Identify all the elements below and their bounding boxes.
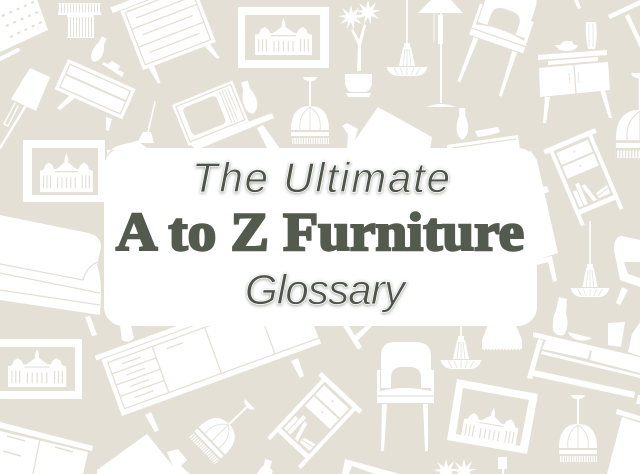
- icon: plant top bottom centre: [433, 459, 477, 474]
- icon: vase right: [553, 297, 568, 335]
- icon: floor lamp: [418, 0, 463, 107]
- icon: table lamp left: [0, 68, 50, 148]
- icon: vase bottom: [257, 459, 273, 474]
- heading: A to Z Furniture: A to Z Furniture: [116, 202, 524, 262]
- icon: framed building top: [238, 7, 329, 68]
- icon: television on table: [172, 80, 281, 150]
- icon: frame bottom centre: [342, 459, 400, 474]
- icon: framed building left: [23, 140, 105, 202]
- icon: nightstand bottom: [264, 372, 362, 472]
- icon: tilted chest of drawers: [110, 0, 233, 90]
- icon: long sideboard: [95, 281, 321, 432]
- icon: potted plant: [338, 0, 381, 97]
- icon: cabinet behind panel right: [530, 150, 558, 282]
- icon: cross bar top right: [574, 0, 640, 48]
- icon: framed building tilted: [447, 379, 538, 454]
- icon: hanging chandelier right: [571, 221, 609, 297]
- icon: pendant lamp centre top: [291, 77, 329, 144]
- icon: cabinet bottom left: [0, 422, 93, 474]
- icon: tilted dome lamp: [189, 390, 263, 464]
- icon: cabinet with vase behind panel: [447, 108, 520, 150]
- icon: cabinet bottom right: [607, 409, 640, 474]
- icon: sofa left: [0, 215, 101, 336]
- icon: tilted chair top right: [454, 0, 543, 99]
- panel: title card: [104, 148, 537, 326]
- icon: lamp shade below panel: [482, 320, 522, 350]
- icon: chair bottom centre: [377, 342, 434, 451]
- icon: pendant lamp top right: [616, 73, 640, 158]
- icon: legs under panel: [343, 326, 372, 350]
- icon: sideboard with bowl and vase: [538, 22, 612, 123]
- heading: Glossary: Glossary: [245, 266, 408, 313]
- icon: tilted bedside table: [55, 35, 136, 131]
- icon: table lamp behind panel: [107, 102, 155, 155]
- icon: dome lamp lower right: [559, 395, 597, 462]
- icon: console table right: [527, 322, 640, 404]
- icon: small lamp bottom: [498, 457, 507, 474]
- icon: hanging chandelier top: [386, 0, 428, 76]
- icon: armchair bottom: [97, 434, 190, 474]
- icon: chair behind panel top centre: [342, 107, 432, 150]
- heading: The Ultimate: The Ultimate: [192, 154, 450, 201]
- icon: armchair right: [614, 236, 640, 305]
- icon: tilted wall sconce: [0, 0, 48, 60]
- icon: tiered chandelier: [58, 3, 101, 38]
- icon: hanging chandelier lower: [440, 293, 482, 369]
- icon: framed building lower left: [0, 339, 82, 399]
- icon: nightstand right: [543, 128, 628, 228]
